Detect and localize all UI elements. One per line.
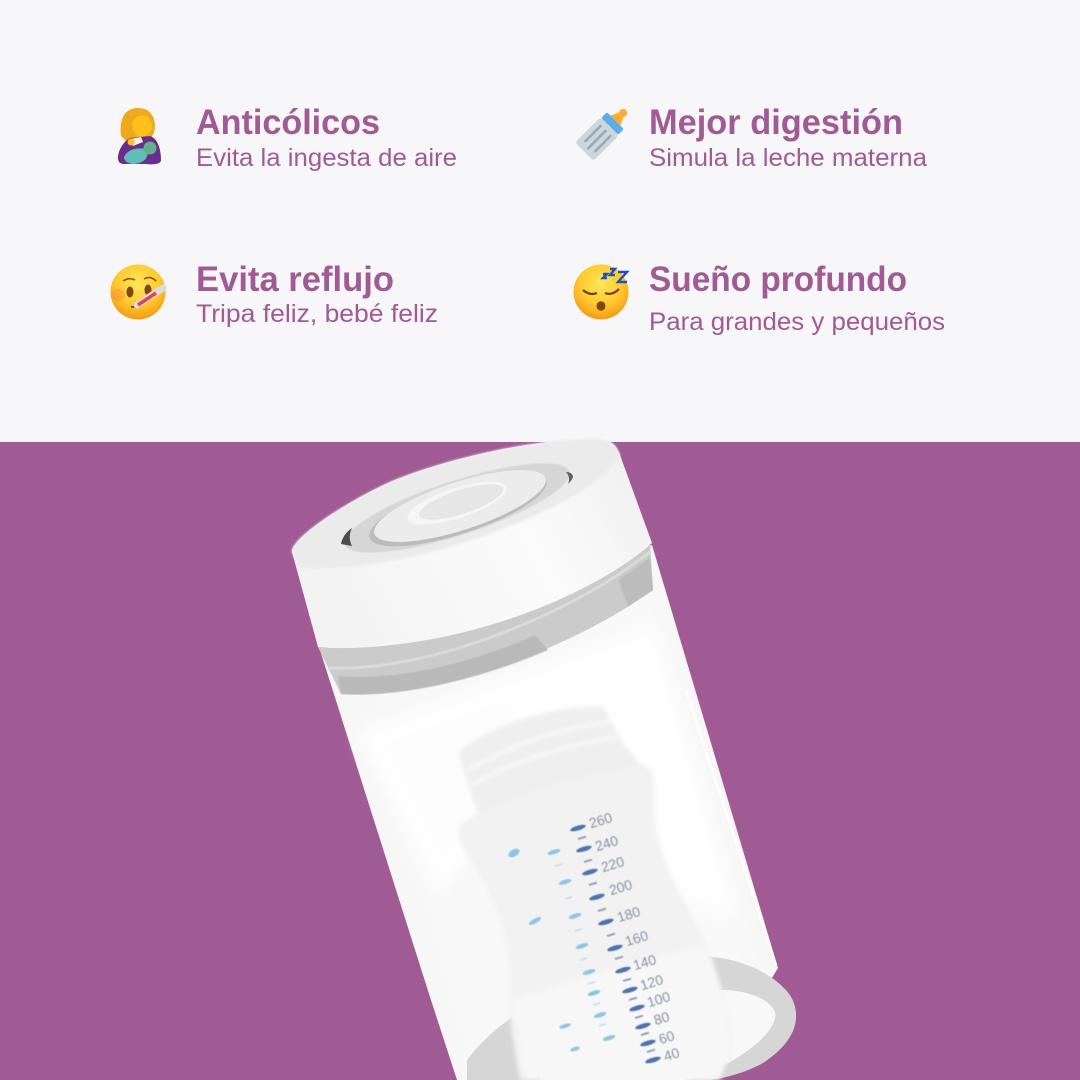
graduation numbers: 60 (657, 1027, 677, 1047)
feature: Mejor digestión (575, 101, 927, 172)
feature: Anticólicos (118, 103, 457, 172)
heading: Evita reflujo: Evita reflujo (196, 260, 394, 299)
graduation ticks: light (555, 864, 606, 1026)
graduation numbers: 200 (607, 876, 634, 898)
lid (292, 439, 652, 648)
graduation numbers: 160 (623, 927, 650, 949)
graduation numbers: 260 (587, 809, 614, 831)
graduation numbers: 40 (662, 1044, 682, 1064)
graduation numbers: 120 (638, 971, 665, 993)
background: purple panel (0, 442, 1080, 1080)
graduation numbers: 220 (599, 853, 626, 875)
bottle neck (458, 707, 640, 820)
graduation numbers (587, 809, 682, 1064)
lid top valve (336, 446, 578, 570)
graduation ticks: grey (578, 837, 655, 1052)
bottle neck threads (468, 722, 618, 785)
heading: Mejor digestión: Mejor digestión (649, 103, 903, 142)
icon: woman feeding baby (118, 108, 161, 164)
background: top panel (0, 0, 1080, 442)
graduation numbers: 180 (615, 903, 642, 925)
bottle body (457, 765, 733, 1080)
text: Tripa feliz, bebé feliz: Tripa feliz, bebé feliz (196, 300, 438, 328)
feature: Sueño profundo (574, 260, 945, 336)
graduation numbers: 240 (593, 832, 620, 854)
heading: Anticólicos: Anticólicos (196, 103, 380, 142)
icon: sleeping face (574, 264, 628, 320)
baby bottle (457, 707, 733, 1080)
jar inner highlights (356, 625, 776, 965)
jar base outer ring (467, 955, 796, 1080)
jar base floor (540, 986, 775, 1080)
text: Simula la leche materna: Simula la leche materna (649, 144, 927, 172)
graduation marks: dark blue (570, 823, 661, 1065)
graduation marks: light blue (507, 847, 616, 1052)
text: Para grandes y pequeños: Para grandes y pequeños (649, 308, 945, 336)
jar glass body (320, 545, 778, 1080)
heading: Sueño profundo: Sueño profundo (649, 260, 907, 299)
product: glass jar with baby bottle (292, 439, 796, 1080)
graduation numbers: 140 (631, 951, 658, 973)
icon: face with thermometer (110, 264, 166, 320)
feature: Evita reflujo (110, 260, 438, 328)
graduation numbers: 80 (652, 1008, 672, 1028)
grey seal band (318, 543, 653, 694)
text: Evita la ingesta de aire: Evita la ingesta de aire (196, 144, 457, 172)
graduation numbers: 100 (645, 988, 672, 1010)
icon: baby bottle (575, 101, 635, 161)
